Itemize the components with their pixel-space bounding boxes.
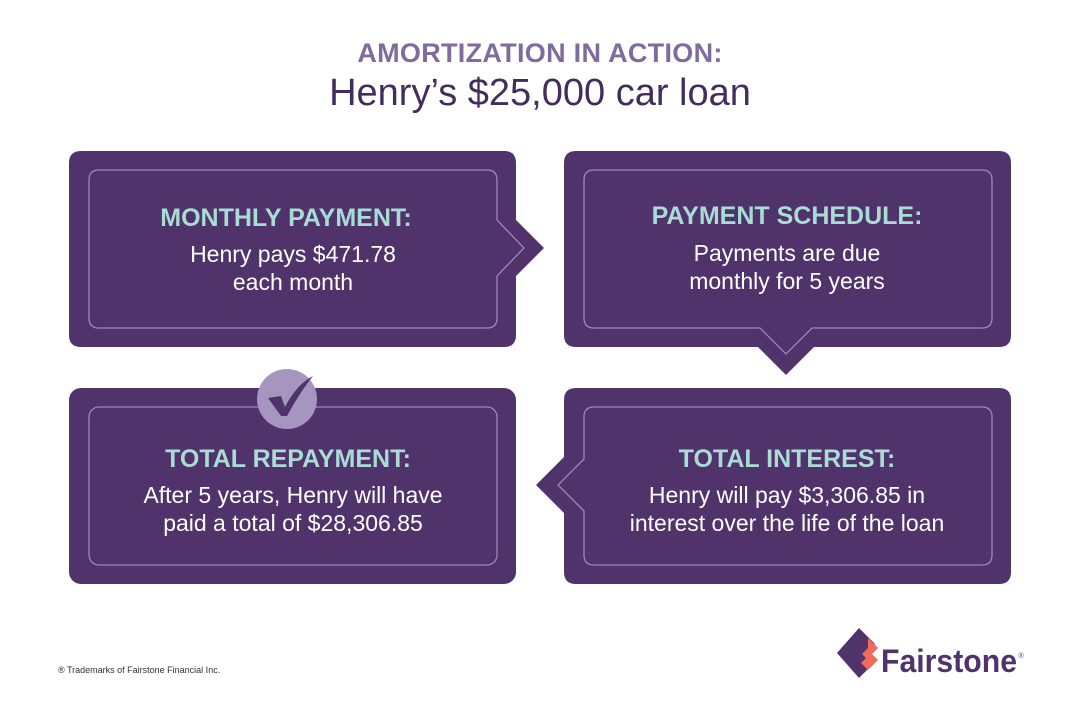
title: AMORTIZATION IN ACTION: xyxy=(357,38,723,68)
panel: monthly payment: each month xyxy=(233,269,353,295)
panel: monthly payment xyxy=(69,151,544,347)
panel: monthly payment: MONTHLY PAYMENT: xyxy=(160,204,412,232)
panel: total repayment: After 5 years, Henry will have xyxy=(143,482,443,508)
icon: check circle xyxy=(257,369,317,429)
panel: total repayment xyxy=(69,369,516,584)
panel: payment schedule: Payments are due xyxy=(694,240,880,266)
panel: payment schedule: PAYMENT SCHEDULE: xyxy=(652,202,922,230)
logo: Fairstone: Fairstone xyxy=(881,643,1017,679)
panel: total interest: Henry will pay $3,306.85 in xyxy=(649,482,925,508)
subtitle: Henry’s $25,000 car loan xyxy=(329,72,751,114)
panel: payment schedule xyxy=(564,151,1011,375)
panel: total interest xyxy=(536,388,1011,584)
panel: total repayment: paid a total of $28,306.85 xyxy=(163,510,423,536)
logo: Fairstone: ® xyxy=(1018,652,1024,660)
panel: monthly payment: Henry pays $471.78 xyxy=(190,241,396,267)
panel: total repayment: TOTAL REPAYMENT: xyxy=(165,445,411,473)
logo: Fairstone xyxy=(837,628,1024,679)
panel: payment schedule: monthly for 5 years xyxy=(689,268,885,294)
footnote: ® Trademarks of Fairstone Financial Inc. xyxy=(58,665,220,675)
panel: total interest: TOTAL INTEREST: xyxy=(679,445,895,473)
panel: total interest: interest over the life of the loan xyxy=(630,510,944,536)
